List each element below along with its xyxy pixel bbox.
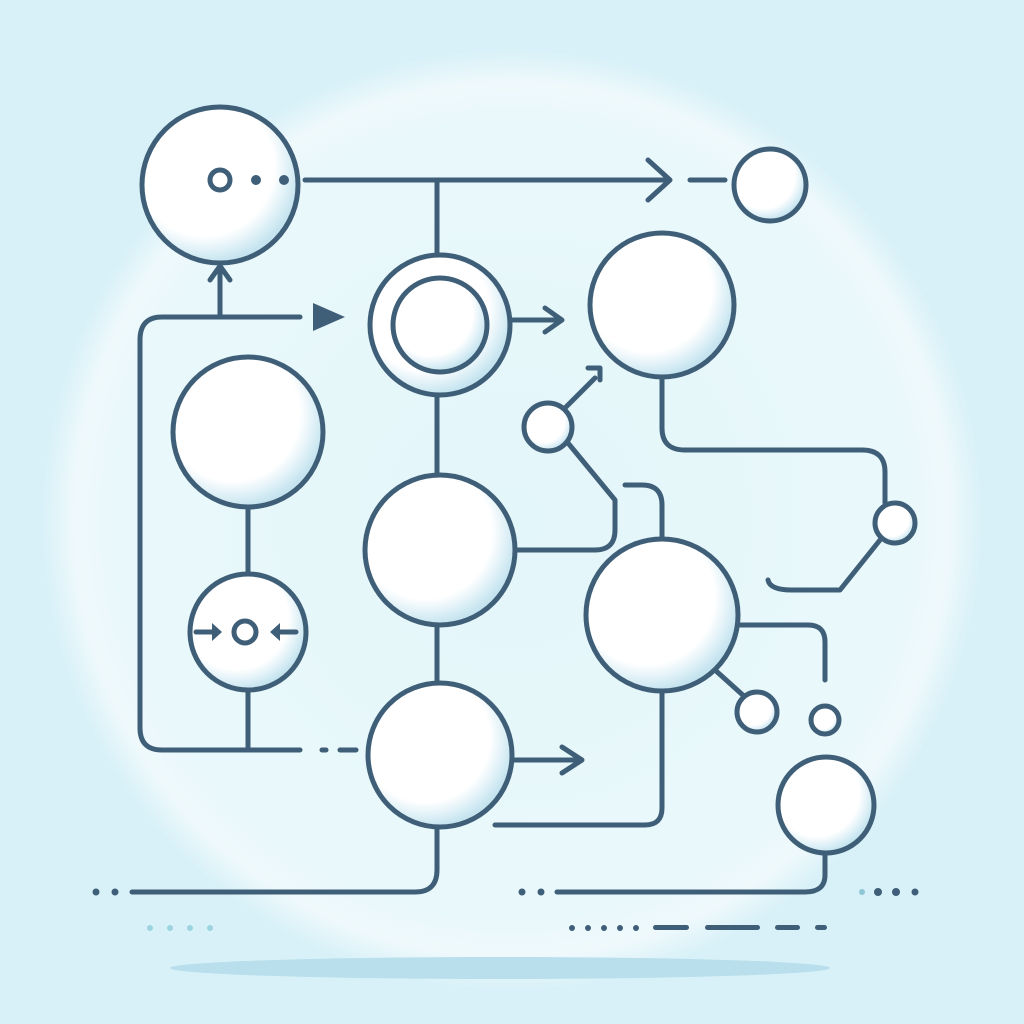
node: far right small (875, 503, 915, 543)
node: top-right small (734, 149, 806, 221)
node: center top double (370, 255, 510, 395)
nodes (142, 107, 915, 853)
node: left middle (173, 357, 323, 507)
shadow (170, 957, 830, 979)
node: right top (590, 233, 734, 377)
node: center bottom (368, 683, 512, 827)
node: center middle (365, 475, 515, 625)
node: small (524, 403, 572, 451)
node: top-left (142, 107, 298, 263)
node: right middle (586, 539, 738, 691)
dots (92, 888, 918, 931)
node: left lower (190, 574, 306, 690)
node details (196, 170, 296, 643)
connectors (132, 160, 885, 892)
node: bottom right (778, 757, 874, 853)
arrow triangle (313, 303, 345, 331)
